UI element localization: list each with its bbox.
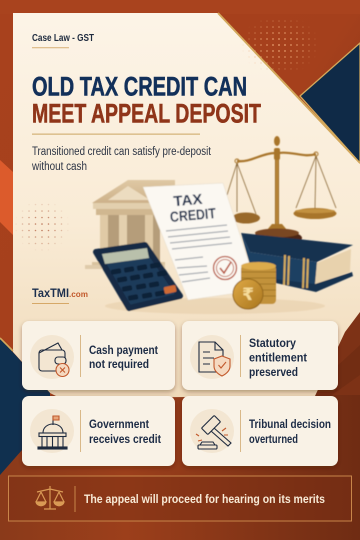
icon: government building	[38, 416, 67, 449]
card: tribunal decision: Tribunal decision	[249, 419, 331, 431]
icon: gavel	[196, 415, 231, 449]
card: cash payment	[22, 321, 175, 390]
title: MEET APPEAL DEPOSIT	[32, 98, 261, 128]
card: cash payment: not required	[89, 359, 149, 371]
icon: scales	[36, 486, 64, 509]
card: government receives credit: Government	[89, 419, 149, 431]
card: tribunal decision	[182, 396, 338, 466]
gold lower left trim	[0, 338, 13, 351]
navy corner triangle	[300, 43, 360, 163]
conclusion banner	[8, 476, 352, 521]
title: OLD TAX CREDIT CAN	[32, 72, 247, 102]
subtitle	[31, 146, 212, 173]
card: government receives credit: receives credit	[89, 434, 161, 446]
card: government receives credit	[22, 396, 175, 466]
illustration	[85, 136, 353, 314]
card: statutory entitlement	[182, 321, 338, 390]
card: cash payment: Cash payment	[89, 345, 158, 357]
icon: document with shield	[199, 342, 230, 376]
book	[241, 233, 353, 292]
subtitle: without cash	[31, 161, 87, 173]
ground shade	[105, 298, 325, 314]
coins with rupee symbol: ₹	[242, 285, 254, 305]
tax credit document	[143, 183, 258, 300]
scales of justice	[227, 136, 336, 246]
brand logo: .com	[69, 289, 88, 299]
category label: Case Law - GST	[32, 33, 94, 44]
brand logo	[32, 286, 88, 304]
tax credit document: TAX	[173, 192, 203, 210]
dot pattern top right	[242, 20, 316, 70]
conclusion banner: The appeal will proceed for hearing on its merits	[84, 492, 325, 506]
card: statutory entitlement: entitlement	[249, 352, 307, 364]
icon: court building	[85, 180, 175, 269]
navy lower left triangle	[0, 338, 50, 475]
icon: wallet with cross	[39, 343, 69, 376]
calculator	[96, 245, 180, 308]
tax credit document: CREDIT	[169, 206, 217, 226]
coins with rupee symbol	[233, 262, 276, 309]
card: statutory entitlement: Statutory	[249, 338, 297, 350]
card: statutory entitlement: preserved	[249, 367, 298, 379]
cream main panel	[13, 13, 360, 398]
gold diagonal trim	[218, 13, 360, 163]
dot pattern left	[16, 204, 68, 250]
title rule	[32, 134, 200, 135]
subtitle: Transitioned credit can satisfy pre-deposit	[32, 146, 212, 158]
category label	[32, 33, 94, 48]
card: tribunal decision: overturned	[249, 434, 298, 446]
brand logo: TaxTMI	[32, 286, 69, 300]
title	[32, 72, 261, 128]
